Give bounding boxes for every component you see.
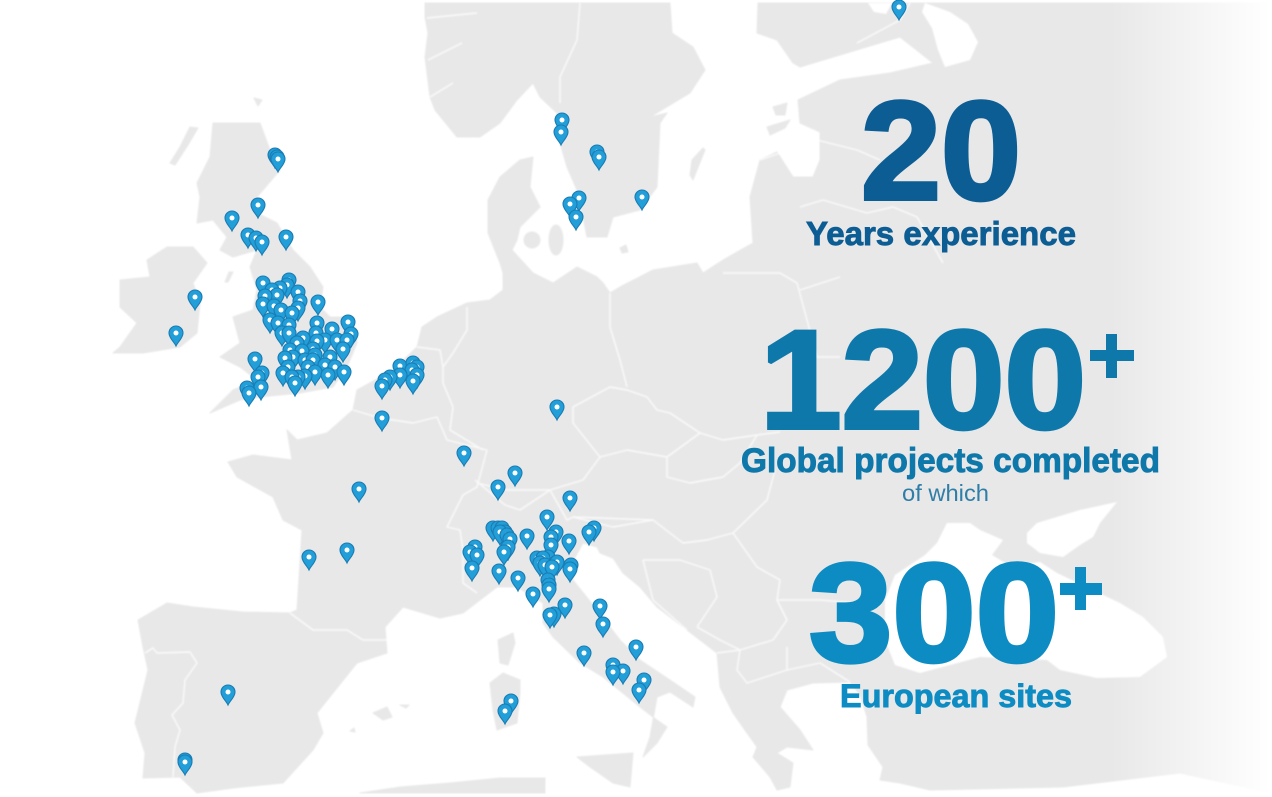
pins: Scotland (225, 148, 293, 255)
landmass: Ireland (113, 247, 207, 353)
landmass: Scandinavia (425, 3, 705, 237)
pins: England and Wales (240, 273, 358, 406)
landmass: Great Britain (197, 123, 357, 413)
number 20: 20 (861, 72, 1021, 229)
pins: France and Spain (178, 482, 366, 775)
seas and lakes (868, 3, 1167, 678)
plus sign (1060, 567, 1102, 610)
Black Sea (885, 523, 1167, 678)
map pins (169, 0, 906, 775)
Sea of Azov (1027, 502, 1117, 557)
stat: 20 years experience (806, 72, 1076, 252)
stat: 300+ European sites (809, 534, 1102, 714)
label: Global projects completed: Global projects completed (741, 442, 1160, 480)
pins: Benelux and northern France (375, 356, 424, 431)
Lake near Saint Petersburg (868, 3, 892, 14)
stat: 1200+ global projects (741, 301, 1160, 506)
islands (170, 98, 790, 793)
pins: Germany, Switzerland, Austria (457, 400, 577, 511)
plus sign (1090, 334, 1134, 378)
country borders (145, 3, 943, 777)
pins: Sweden and Finland (554, 0, 906, 230)
right side fade (1110, 0, 1270, 797)
label: Years experience: Years experience (806, 215, 1076, 252)
pins: Ireland (169, 290, 202, 346)
label: of which: of which (902, 480, 989, 506)
Lake Ladoga (922, 3, 978, 67)
pins: Italy (463, 510, 651, 724)
number 1200: 1200 (760, 301, 1086, 458)
label: European sites: European sites (840, 678, 1072, 714)
number 300: 300 (809, 534, 1059, 691)
